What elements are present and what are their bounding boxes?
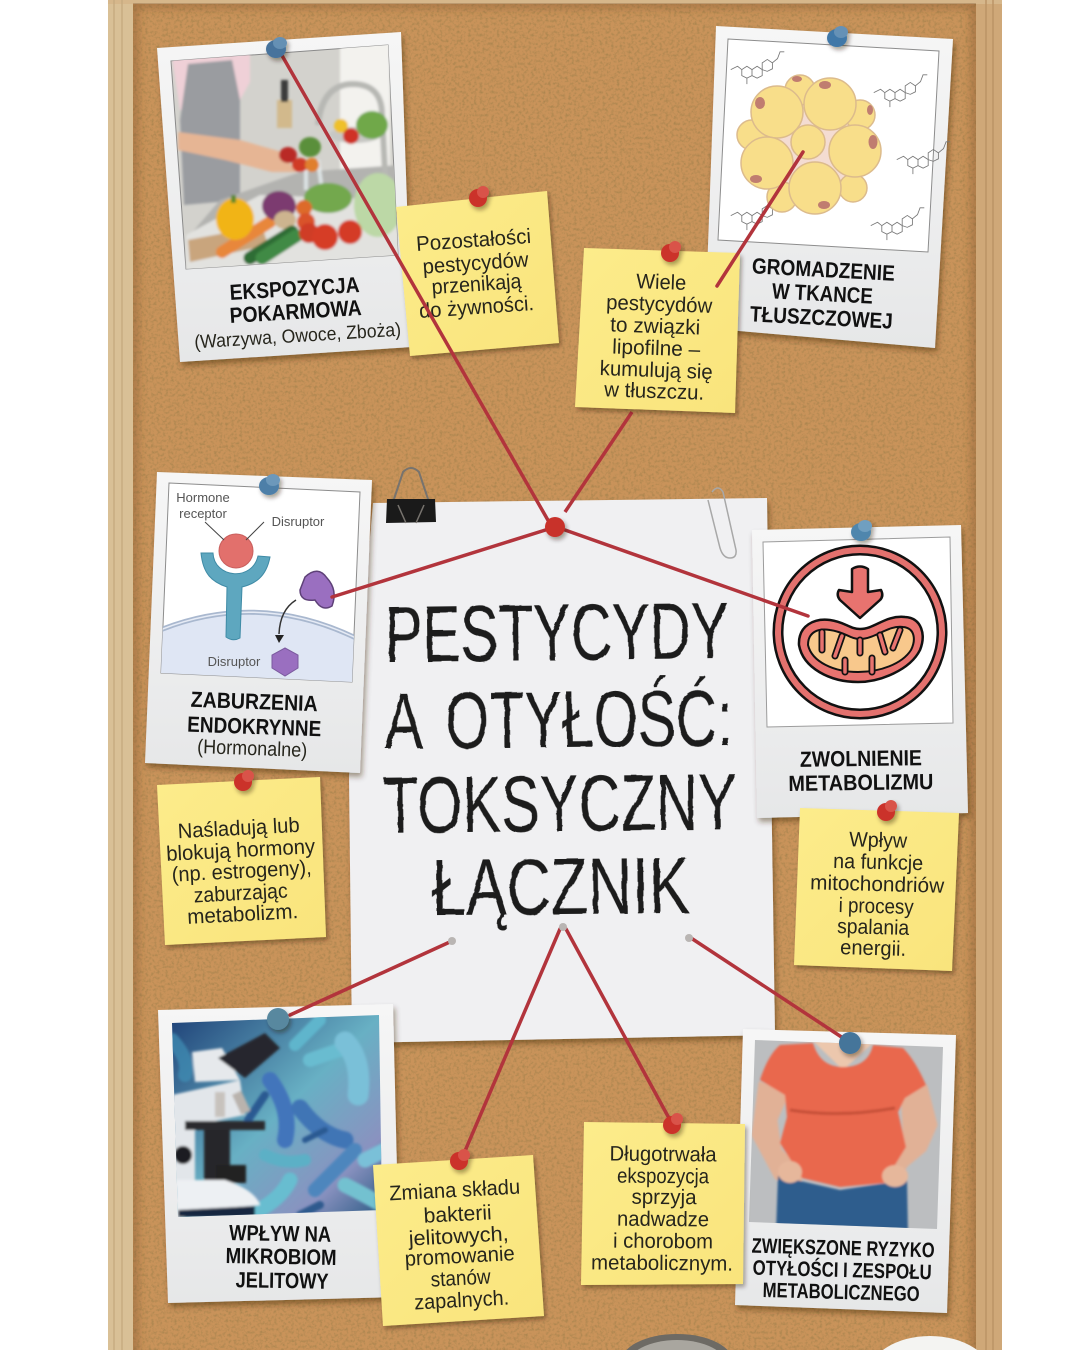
note: mitochondria (794, 808, 959, 971)
caption: (Warzywa, Owoce, Zboża) (194, 320, 402, 353)
caption (751, 1235, 935, 1306)
note: long-term exposure: i chorobom (613, 1230, 713, 1253)
note: food residues: przenikają (431, 270, 523, 299)
pins: red (234, 186, 897, 1170)
note: mitochondria: na funkcje (833, 850, 923, 875)
caption: MIKROBIOM (225, 1243, 337, 1270)
caption: EKSPOZYCJA (229, 272, 360, 305)
caption (749, 253, 895, 334)
note: food residues: pestycydów (422, 248, 530, 279)
caption: POKARMOWA (229, 295, 362, 328)
note: mitochondria: mitochondriów (810, 871, 945, 898)
panel: gut microbiome (158, 1004, 400, 1303)
note: mitochondria: Wpływ (849, 828, 908, 853)
caption (187, 687, 322, 762)
title: PESTYCYDY (384, 586, 729, 679)
note: gut bacteria: zapalnych. (414, 1287, 510, 1314)
note: gut bacteria: bakterii (423, 1201, 492, 1228)
caption: GROMADZENIE (751, 253, 895, 286)
panel: fat tissue accumulation (705, 26, 953, 348)
panel: slowed metabolism (752, 525, 968, 818)
panel: endocrine disruption (145, 472, 372, 773)
caption (788, 745, 934, 796)
note: gut bacteria: Zmiana składu (389, 1176, 521, 1205)
decoration: cup at bottom edge (621, 1334, 733, 1350)
central paper (349, 498, 775, 1043)
label: receptor (179, 506, 228, 521)
title: A OTYŁOŚĆ: (384, 673, 733, 766)
caption: ZWIĘKSZONE RYZYKO (751, 1235, 935, 1262)
icon: mitochondrion with down arrow (763, 537, 953, 727)
note: hormones: (np. estrogeny), (171, 856, 312, 887)
caption: ENDOKRYNNE (187, 712, 322, 741)
note: hormones: zaburzając (193, 880, 288, 907)
caption: OTYŁOŚCI I ZESPOŁU (752, 1256, 932, 1284)
photo: microscope and bacteria (172, 1015, 385, 1220)
caption: (Hormonalne) (197, 736, 308, 762)
note: gut bacteria: jelitowych, (407, 1222, 509, 1251)
note: gut bacteria (373, 1155, 544, 1326)
note: lipophilic compounds: Wiele (636, 270, 687, 295)
pins: blue (259, 26, 872, 1054)
note: long-term exposure: metabolicznym. (591, 1251, 733, 1276)
note: food residues: do żywności. (418, 292, 535, 323)
illustration: hormone receptor (160, 483, 360, 690)
title: TOKSYCZNY (382, 757, 737, 850)
note: lipophilic compounds: lipofilne – (612, 335, 701, 362)
note: lipophilic compounds (575, 248, 740, 413)
note: mitochondria: spalania (837, 915, 910, 940)
caption (194, 272, 402, 353)
title (382, 586, 737, 932)
caption: JELITOWY (235, 1267, 329, 1294)
note: food residues (396, 191, 559, 356)
caption: W TKANCE (771, 278, 873, 309)
note: long-term exposure (581, 1122, 745, 1285)
paperclip (708, 488, 736, 558)
strings: red connectors (280, 52, 843, 1158)
illustration: fat cells (718, 39, 950, 252)
title: ŁĄCZNIK (431, 841, 690, 932)
label: Disruptor (272, 514, 325, 529)
note: food residues: Pozostałości (415, 225, 532, 256)
string: behind note to hub (565, 412, 632, 512)
note: lipophilic compounds: to związki (610, 313, 701, 340)
note: long-term exposure: Długotrwała (609, 1143, 717, 1166)
caption: ZABURZENIA (190, 687, 318, 716)
note: mitochondria: energii. (840, 936, 906, 961)
note: lipophilic compounds: w tłuszczu. (603, 378, 705, 405)
note: hormones (157, 777, 326, 945)
caption: TŁUSZCZOWEJ (749, 301, 893, 334)
label: Disruptor (208, 654, 261, 669)
caption: METABOLICZNEGO (762, 1279, 920, 1306)
note: long-term exposure: nadwadze (617, 1208, 709, 1231)
note: hormones: blokują hormony (166, 835, 316, 866)
caption: METABOLIZMU (788, 769, 934, 796)
panel: food exposure (157, 32, 412, 362)
note: mitochondria: i procesy (838, 894, 914, 919)
photo: washing vegetables (171, 40, 402, 275)
note: gut bacteria: promowanie (404, 1242, 515, 1271)
photo: torso in red shirt (749, 1040, 943, 1234)
note: long-term exposure: sprzyja (631, 1186, 697, 1209)
pins: small grey on paper (448, 923, 693, 945)
note: lipophilic compounds: kumulują się (599, 357, 713, 384)
caption: ZWOLNIENIE (800, 745, 922, 772)
note: hormones: metabolizm. (187, 900, 299, 929)
note: hormones: Naśladują lub (177, 814, 300, 843)
decoration: plate at bottom edge (868, 1336, 992, 1350)
label: Hormone (176, 490, 230, 505)
panel: obesity risk (735, 1029, 956, 1313)
note: lipophilic compounds: pestycydów (606, 291, 713, 318)
caption: WPŁYW NA (229, 1220, 331, 1247)
binder clip (386, 468, 436, 523)
note: long-term exposure: ekspozycja (617, 1165, 709, 1188)
caption (225, 1220, 337, 1294)
note: gut bacteria: stanów (430, 1265, 492, 1292)
